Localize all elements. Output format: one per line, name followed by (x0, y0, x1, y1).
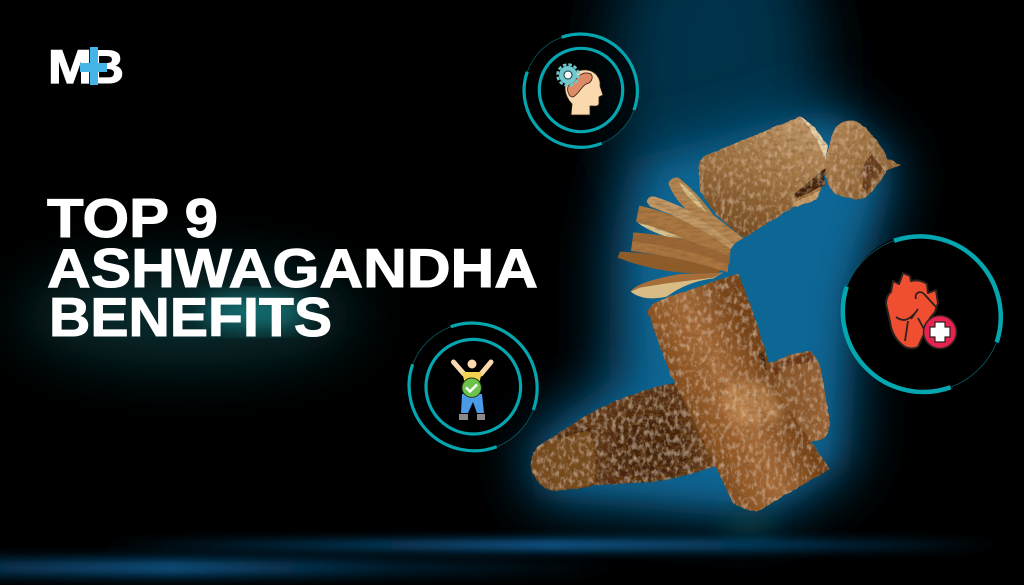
medical cross badge (924, 316, 956, 348)
outer ring segments (409, 323, 537, 451)
title line 1: TOP 9 (47, 187, 218, 249)
ring icon: heart health (843, 233, 1003, 393)
blue backlight glow behind the root (525, 0, 900, 520)
horizontal root (530, 351, 829, 491)
slice 5 (618, 252, 722, 273)
logo letter M: M (48, 40, 92, 93)
ring backing (525, 34, 637, 146)
ring backing (409, 323, 537, 451)
brain (568, 73, 592, 97)
floor light bands (0, 510, 1000, 574)
logo letter B: B (88, 40, 124, 93)
head (565, 70, 603, 115)
outer ring segments (524, 34, 637, 147)
head (468, 360, 476, 368)
stacked root slices (618, 178, 743, 273)
ring segments (843, 236, 1001, 392)
feet (459, 414, 485, 420)
logo: MB with blue plus (48, 40, 124, 93)
title line 3: BENEFITS (49, 286, 332, 348)
legs (461, 394, 484, 413)
ring icon: brain and head (524, 34, 637, 147)
arms (454, 362, 491, 374)
upright cut log (648, 273, 830, 512)
gear (558, 64, 578, 86)
inner ring (426, 339, 521, 434)
heart (886, 273, 938, 348)
slice 3 (632, 232, 731, 264)
slice 1 (647, 196, 737, 249)
person (454, 360, 491, 420)
tilted slice face (679, 182, 707, 212)
ashwagandha root illustration (530, 117, 901, 512)
top cut root (698, 117, 827, 238)
shirt (462, 372, 482, 384)
title glow (20, 265, 360, 365)
check badge (462, 378, 481, 397)
tilted slice (668, 178, 743, 244)
title line 2: ASHWAGANDHA (47, 237, 538, 299)
inner ring (539, 48, 623, 132)
bottom slice (631, 273, 723, 298)
ring backing (843, 233, 1003, 393)
ring icon: healthy person (409, 323, 537, 451)
slice 4 (631, 241, 729, 272)
slice 2 face (637, 222, 683, 238)
logo plus (80, 47, 107, 85)
root tip (825, 120, 901, 199)
heart veins (896, 292, 936, 341)
title (47, 187, 538, 348)
slice 2 (636, 206, 731, 256)
